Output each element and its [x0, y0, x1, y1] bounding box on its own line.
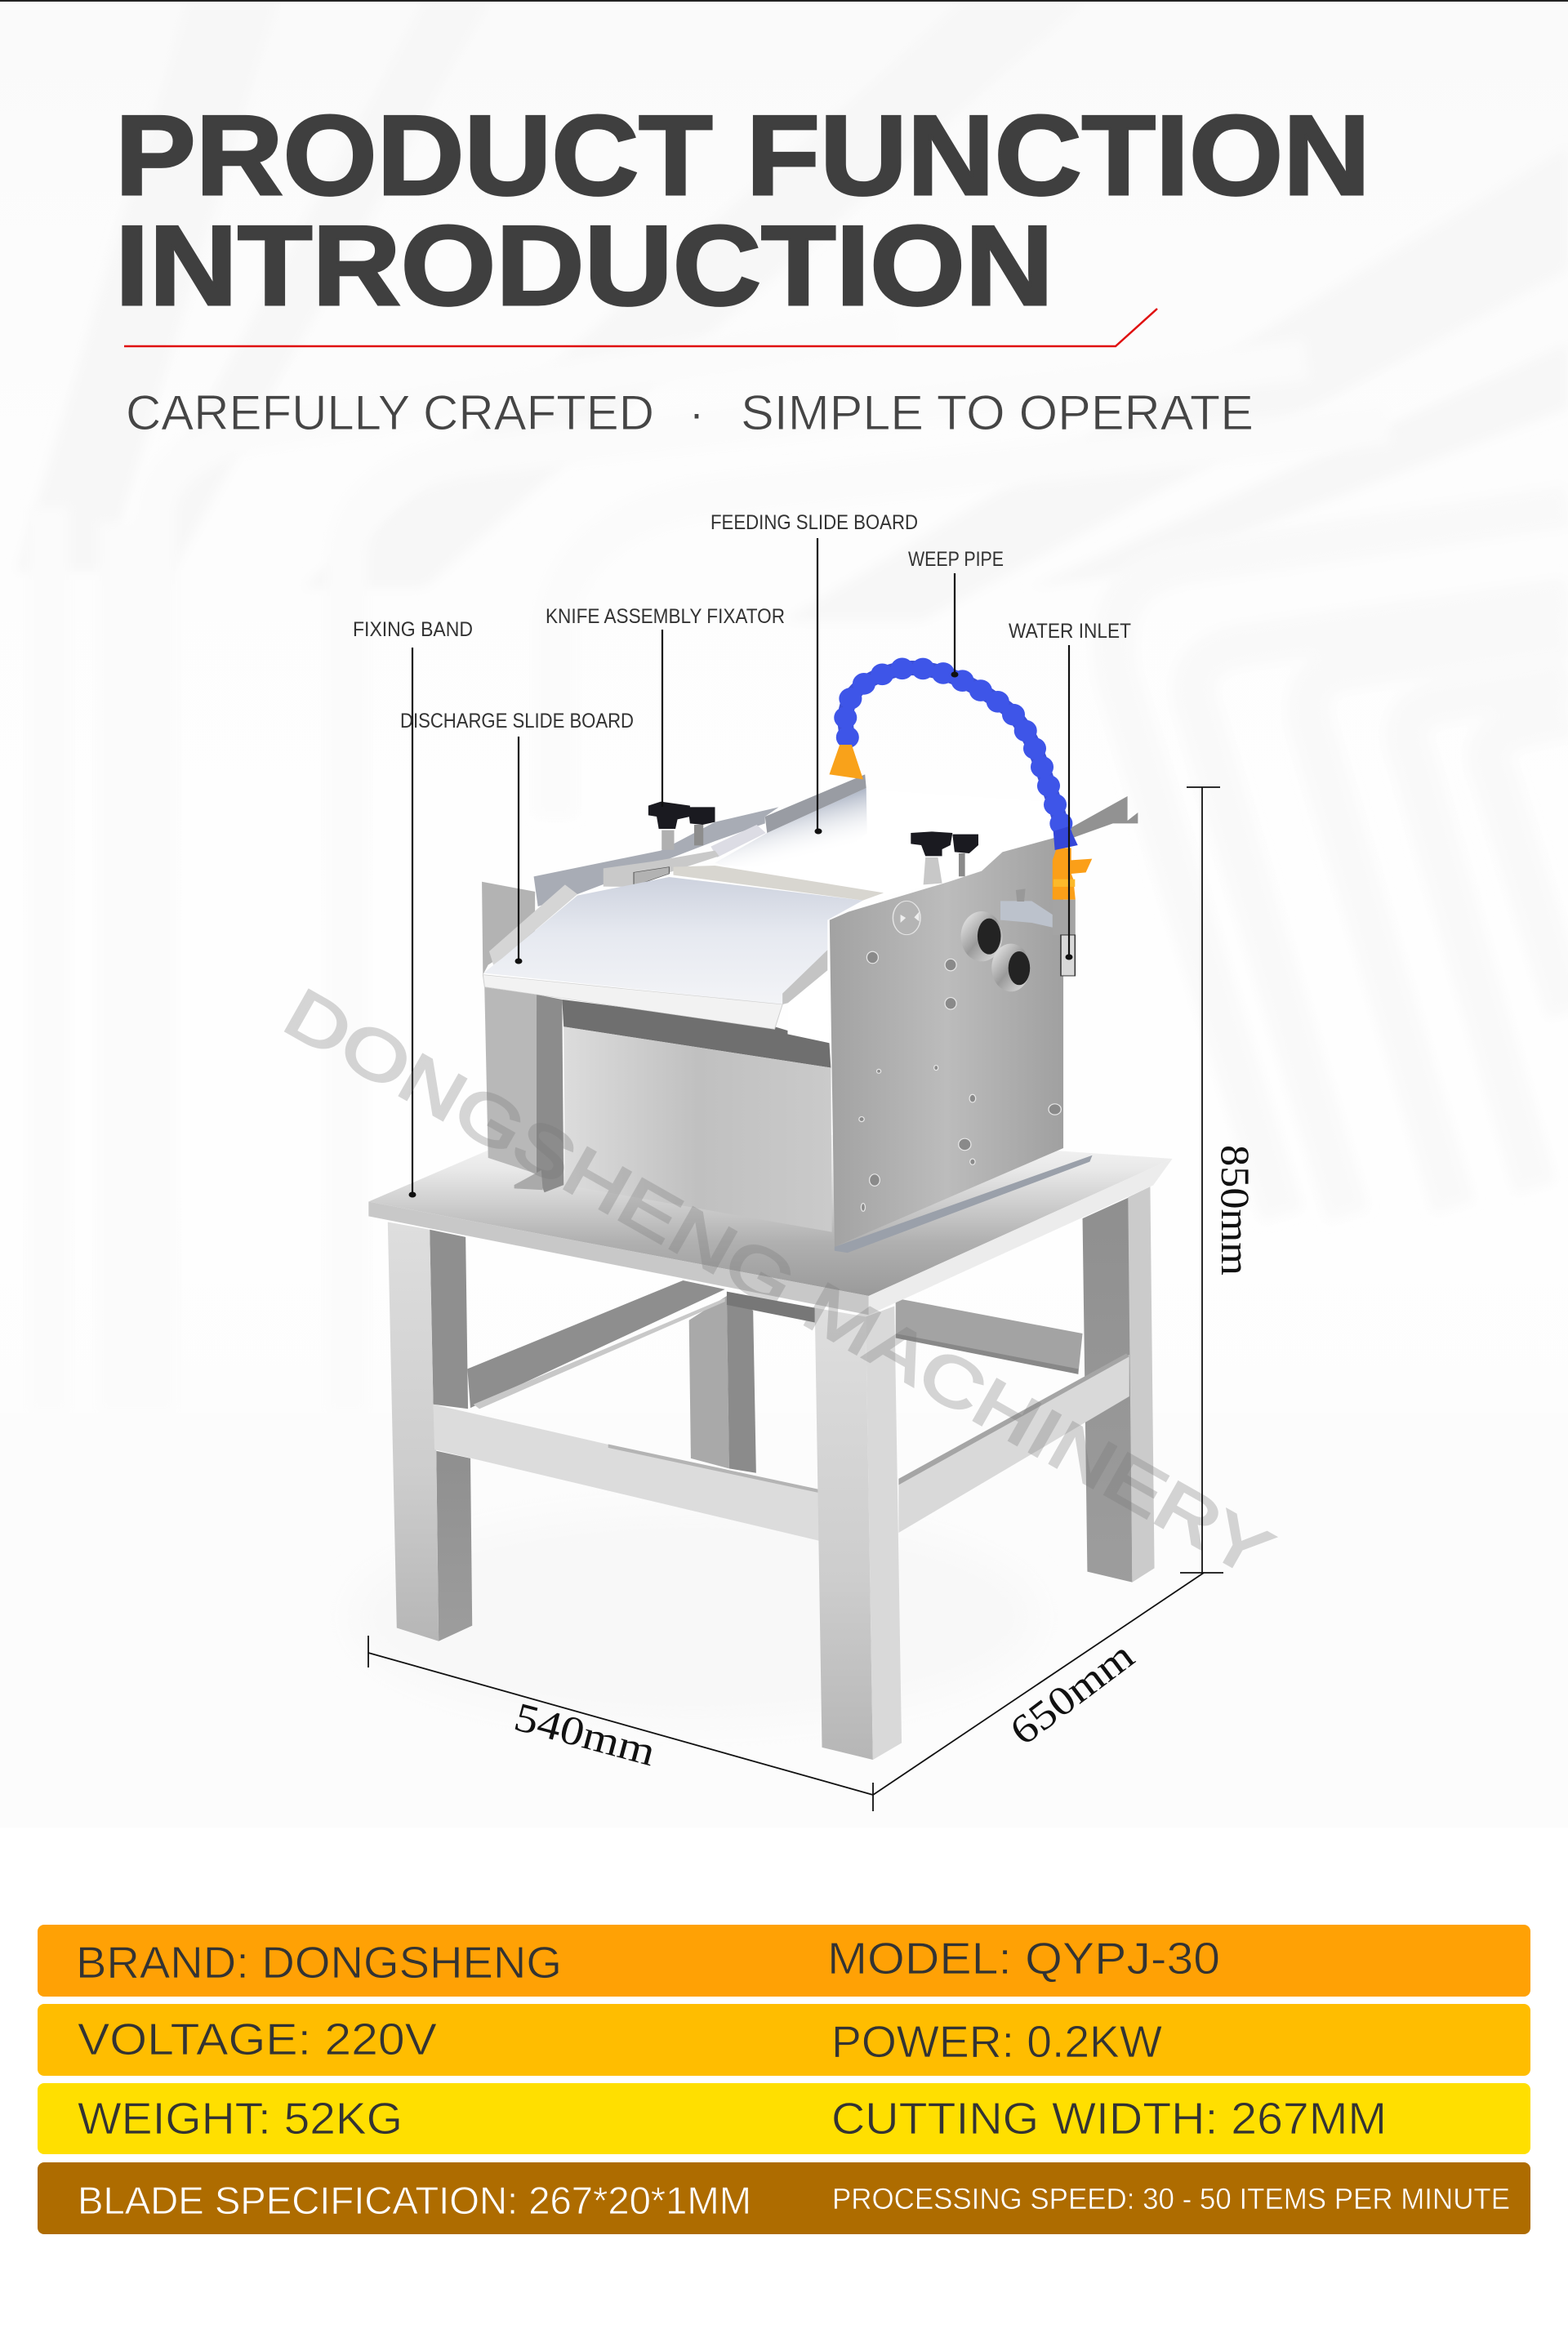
left knob assembly — [648, 802, 715, 850]
callout: feeding slide board line — [815, 538, 822, 835]
dimension labels: 650mm — [1001, 1632, 1143, 1754]
part labels: KNIFE ASSEMBLY FIXATOR — [546, 605, 785, 628]
background: architectural light bands — [0, 0, 1568, 1828]
spec row: voltage and power: VOLTAGE: 220V — [78, 2014, 437, 2064]
red underline accent — [124, 309, 1157, 346]
part labels: WATER INLET — [1009, 620, 1131, 643]
depth dimension line — [873, 1573, 1204, 1795]
callout: water inlet line — [1065, 645, 1073, 960]
spec row: voltage and power — [38, 2004, 1530, 2076]
discharge slide board — [483, 877, 863, 1029]
spec row: weight and cutting width: WEIGHT: 52KG — [78, 2093, 403, 2144]
right knob assembly — [911, 831, 978, 884]
specification table — [38, 1925, 1530, 2234]
feeding slide board — [715, 790, 1071, 901]
left leg — [388, 1222, 472, 1641]
blade block — [604, 851, 719, 887]
spec row: weight and cutting width: CUTTING WIDTH: 267MM — [831, 2093, 1387, 2144]
dimension labels: 850mm — [1213, 1145, 1258, 1276]
subtitle: SIMPLE TO OPERATE — [741, 385, 1254, 440]
title — [115, 92, 1370, 329]
spec row: blade specification and processing speed: BLADE SPECIFICATION: 267*20*1MM — [78, 2179, 751, 2222]
callout: weep pipe line — [951, 573, 959, 678]
white clamp bar — [710, 825, 766, 857]
spec row: brand and model: BRAND: DONGSHENG — [76, 1937, 562, 1988]
subtitle: CAREFULLY CRAFTED — [126, 385, 654, 440]
water valve — [1000, 888, 1076, 976]
part labels — [353, 511, 1131, 732]
width dimension line — [368, 1636, 873, 1811]
part labels: WEEP PIPE — [908, 548, 1004, 571]
weep pipe — [845, 668, 1078, 850]
subtitle: · — [688, 385, 705, 440]
far rail end — [1071, 796, 1138, 839]
bottom flange — [835, 1155, 1093, 1253]
wing plate — [534, 807, 779, 906]
dimension labels — [510, 1145, 1258, 1774]
feed rail — [765, 774, 866, 833]
callout: fixing band line — [408, 648, 416, 1197]
height dimension line — [1180, 787, 1223, 1573]
rear crossbars — [467, 1280, 1083, 1409]
rear left plate — [482, 882, 540, 1175]
lower machine body — [482, 882, 832, 1232]
right crossbar — [898, 1353, 1129, 1533]
spec row: brand and model: MODEL: QYPJ-30 — [827, 1933, 1220, 1984]
rear leg — [689, 1296, 756, 1473]
subtitle — [126, 385, 1254, 440]
lower plate details — [829, 668, 1093, 1253]
central box — [514, 973, 832, 1232]
dimension lines — [368, 787, 1223, 1811]
title: INTRODUCTION — [115, 203, 1054, 329]
stand: table with legs — [368, 1116, 1173, 1760]
spec row: blade specification and processing speed: PROCESSING SPEED: 30 - 50 ITEMS PER MINUTE — [832, 2182, 1510, 2215]
top border line — [0, 0, 1568, 2]
bolts on side plate — [859, 951, 1061, 1211]
title: PRODUCT FUNCTION — [115, 92, 1370, 219]
orange nozzle — [829, 745, 863, 779]
orange coupling — [1053, 848, 1092, 900]
watermark: DONGSHENG MACHINERY — [273, 974, 1284, 1592]
mounting disc — [893, 901, 920, 935]
dimension labels: 540mm — [510, 1694, 661, 1774]
front leg — [815, 1306, 902, 1760]
callout lines with markers — [408, 538, 1073, 1197]
light cross bar — [673, 866, 884, 901]
spec row: voltage and power: POWER: 0.2KW — [831, 2016, 1162, 2067]
front crossbar — [434, 1405, 819, 1541]
right leg — [1083, 1187, 1155, 1583]
part labels: FIXING BAND — [353, 618, 473, 641]
part labels: DISCHARGE SLIDE BOARD — [400, 710, 634, 732]
spec row: brand and model — [38, 1925, 1530, 1997]
spec row: weight and cutting width — [38, 2083, 1530, 2154]
bearing rings — [961, 911, 1030, 991]
cutting machine — [482, 668, 1138, 1253]
feeding board shadow — [715, 788, 867, 871]
spec row: blade specification and processing speed — [38, 2162, 1530, 2234]
table top — [368, 1116, 1173, 1315]
callout: knife assembly fixator line — [662, 630, 663, 807]
part labels: FEEDING SLIDE BOARD — [710, 511, 918, 534]
upper machine assembly — [483, 774, 1138, 1247]
side plate — [830, 835, 1063, 1247]
callout: discharge slide board line — [514, 737, 523, 964]
